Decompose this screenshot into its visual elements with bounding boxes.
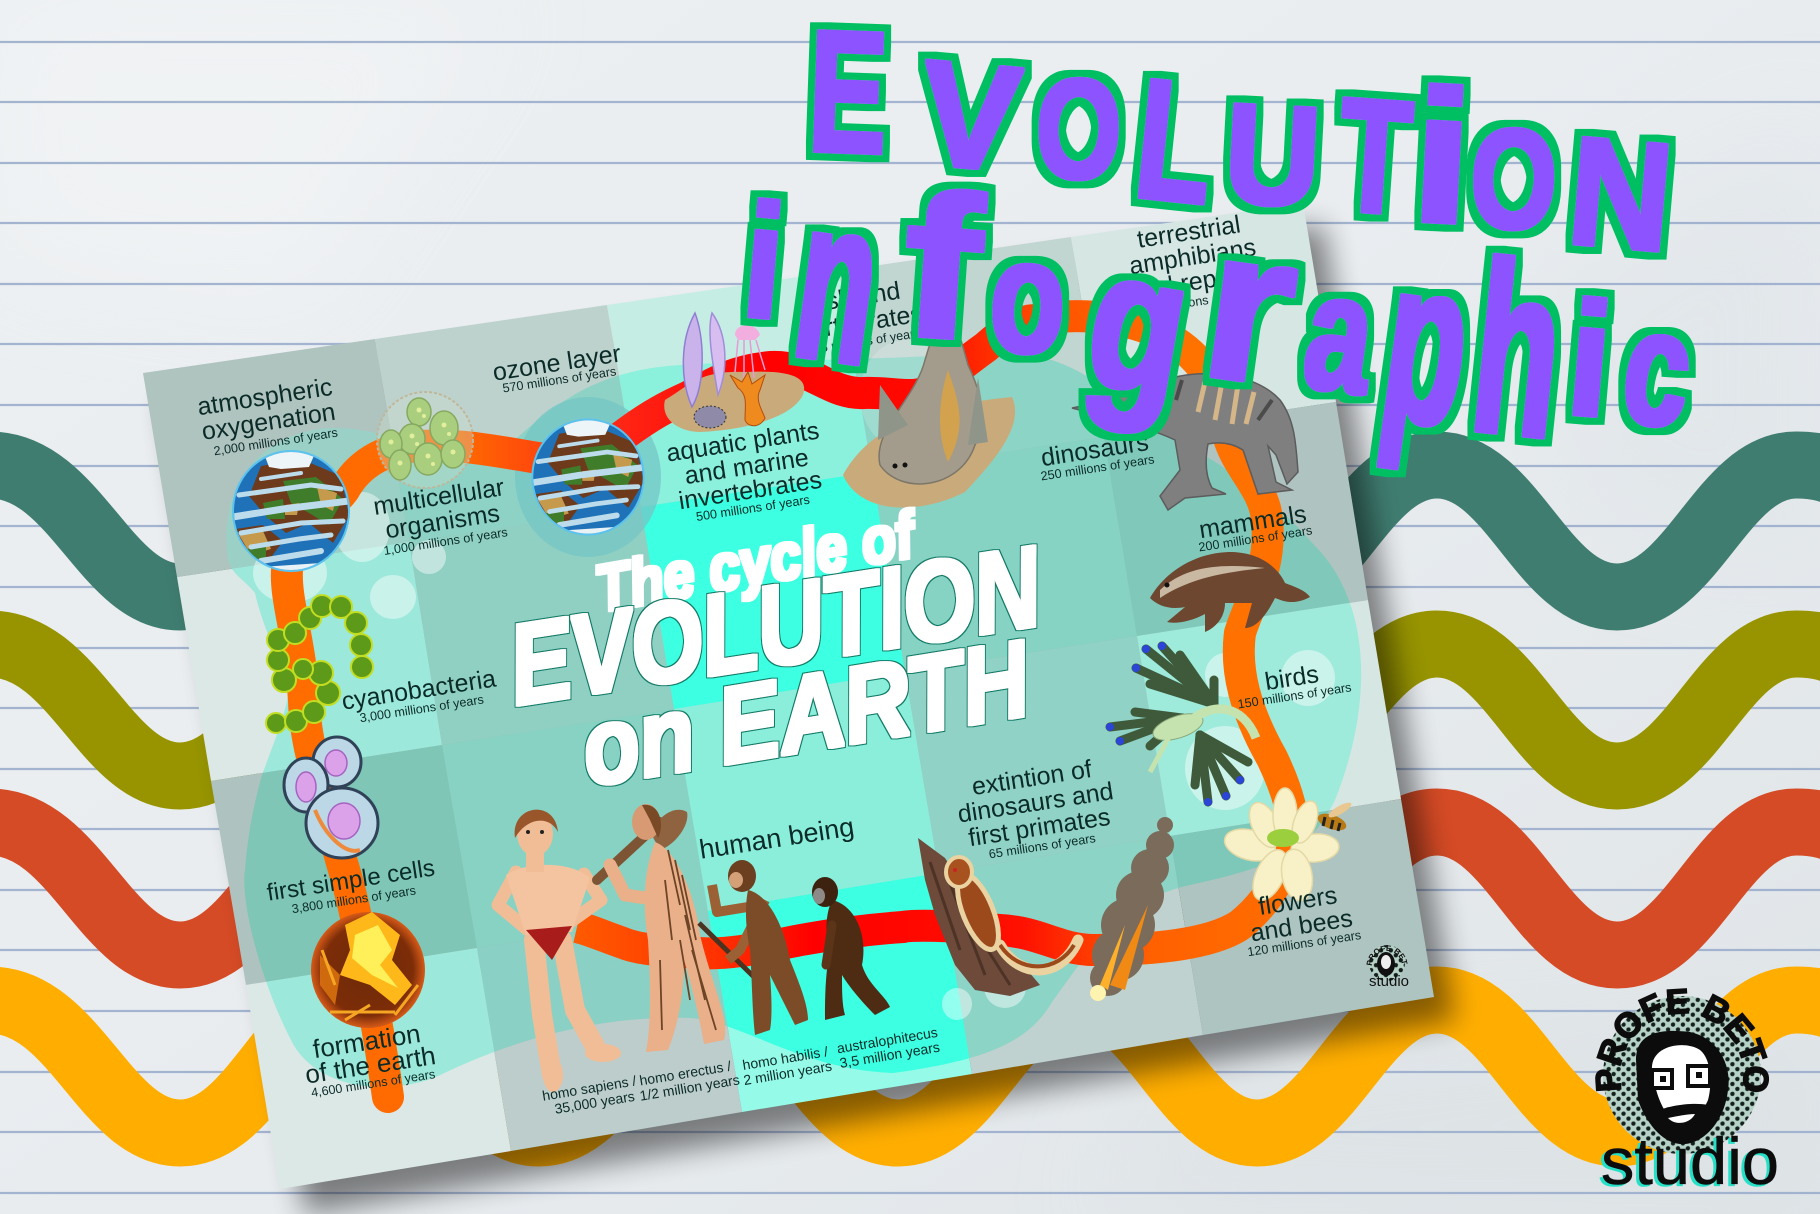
title line: Evolution: O [1468,98,1560,260]
title line: infographic: r [1190,181,1311,433]
title line: Evolution: T [1333,63,1417,249]
logo face [1636,1031,1729,1144]
label: first simple cells: 3,800 millions of years [291,883,417,916]
orange to red evolution road [287,316,1293,1097]
label: homo erectus [636,1057,741,1104]
label: aquatic plants and marine invertebrates: invertebrates [677,466,824,515]
label: homo habilis: 2 million years [742,1058,833,1088]
light bubbles [253,340,1335,1020]
label: extinction of dinosaurs and first primates: 65 millions of years [988,831,1097,861]
title line: Evolution: V [914,30,1027,203]
label: fish and vertebrates: fish and [811,277,902,318]
icon: multicellular organism [377,392,473,488]
title line: Evolution: i [1405,50,1479,264]
label: dinosaurs: dinosaurs [1039,428,1150,472]
label: fish and vertebrates: 435 millions of years [806,326,921,357]
label: atmospheric oxygenation: atmospheric [195,373,334,421]
label: aquatic plants and marine invertebrates: aquatic plants [664,417,821,468]
label: homo erectus: 1/2 million years [638,1071,741,1104]
label: human being: human being [697,811,856,865]
label: homo erectus: homo erectus / [638,1058,732,1089]
label: homo sapiens: 35,000 years [553,1088,636,1117]
wave: olive [0,644,1820,776]
label: multicellular organisms [371,473,512,558]
title line: Evolution: U [1221,74,1324,238]
label: formation of the earth: formation [311,1018,422,1064]
title line: infographic: c [1613,272,1703,464]
icon: first simple cells [284,737,378,858]
title line: infographic: o [986,205,1070,389]
icon: squirrel on tree [918,838,1078,996]
label: terrestrial amphibians and reptiles: terrestrial [1135,210,1242,254]
icon: homo erectus [597,804,725,1052]
label: ozone layer: ozone layer [491,339,623,387]
title line: infographic [737,145,1703,491]
icon: oxygenated earth [231,449,351,575]
label: extinction of dinosaurs and first primates: first primates [967,803,1112,852]
icon: prehistoric fish [843,300,1015,508]
logo arc text: PROFE BETO [1595,988,1770,1092]
label: terrestrial amphibians and reptiles: amphibians [1127,233,1258,280]
icon: homo habilis [699,860,808,1035]
label: formation of the earth: 4,600 millions of years [310,1067,436,1100]
teal blob over poster [226,356,1362,1087]
title: the cycle of evolution on earth: on EARTH [573,617,1039,809]
poster fold cells [143,203,1434,1189]
label: homo sapiens [541,1072,640,1119]
label: flowers and bees: 120 millions of years [1246,928,1362,959]
label: homo habilis [740,1043,833,1088]
label: multicellular organisms: multicellular [371,473,506,521]
icon: dinosaur [1072,374,1298,510]
label: flowers and bees: and bees [1249,904,1355,947]
label: formation of the earth [299,1016,439,1100]
title line: infographic: a [1295,236,1387,430]
earth halo [515,397,661,557]
wave: red [0,822,1820,955]
icon: australopithecus [812,877,890,1020]
label: multicellular organisms: 1,000 millions of years [383,525,509,558]
label: cyanobacteria: cyanobacteria [340,664,498,716]
title line: Evolution: O [1033,48,1124,210]
label: aquatic plants and marine invertebrates: 500 millions of years [695,493,811,524]
label: ozone layer: 570 millions of years [502,364,617,395]
panel: poster [143,209,1434,1188]
title line: infographic: i [737,170,791,354]
label: birds: 150 millions of years [1237,680,1352,711]
poster shadow [165,225,1455,1214]
logo studio word: studio [1598,1126,1776,1200]
label: mammals: 200 millions of years [1198,523,1313,554]
title line: Evolution: E [806,0,890,191]
title line: Evolution: L [1128,42,1223,240]
label: aquatic plants and marine invertebrates [664,417,830,527]
label: atmospheric oxygenation: 2,000 millions of years [213,426,339,458]
title line: infographic: g [1073,204,1205,440]
title line: infographic: i [1561,268,1619,452]
label: atmospheric oxygenation: oxygenation [200,398,337,446]
label: extinction of dinosaurs and first primates: extintion of [970,755,1094,801]
title: Evolution infographic [737,0,1703,491]
title line: infographic: h [1461,211,1574,491]
icon: bird [1106,642,1256,806]
title line: infographic: n [782,145,895,415]
label: terrestrial amphibians and reptiles: and reptiles [1130,258,1262,305]
label: extinction of dinosaurs and first primates [952,752,1121,865]
title line: Evolution: N [1562,105,1679,285]
title line: Evolution [806,0,1679,285]
label: atmospheric oxygenation [195,373,340,460]
label: dinosaurs: 250 millions of years [1040,452,1155,483]
title line: infographic: p [1369,207,1485,478]
label: fish and vertebrates: vertebrates [797,299,925,346]
title: the cycle of evolution on earth [501,496,1051,809]
icon: small studio logo [1366,945,1409,990]
label: australophitecus: 3,5 million years [838,1039,941,1071]
icon: meteor [1090,817,1174,1001]
label: cyanobacteria: 3,000 millions of years [359,692,485,725]
logo studio word: studio [1601,1124,1779,1198]
label: flowers and bees: flowers [1257,881,1339,921]
icon: flower and bee [1221,788,1353,905]
label: mammals: mammals [1197,500,1308,544]
title line: infographic: f [895,150,990,383]
label: extinction of dinosaurs and first primates: dinosaurs and [956,777,1115,829]
label: first simple cells: first simple cells [265,854,437,907]
icon: cyanobacteria chain [266,595,373,733]
icon: homo sapiens [498,810,621,1092]
label: formation of the earth: of the earth [303,1040,438,1090]
label: terrestrial amphibians and reptiles [1123,208,1264,318]
label: homo habilis: homo habilis / [741,1043,829,1073]
label: australophitecus [836,1024,941,1071]
icon: ozone layer earth [530,417,646,538]
title: the cycle of evolution on earth: EVOLUTION [501,523,1051,730]
wave: yellow [0,1000,1820,1133]
label: australophitecus: australophitecus [836,1024,939,1056]
icon: small studio logo: studio [1369,973,1409,990]
label: fish and vertebrates [793,274,926,358]
title: the cycle of evolution on earth: The cycle of [590,496,925,626]
wave: teal [0,465,1820,597]
icon: molten earth [311,912,425,1028]
label: terrestrial amphibians and reptiles: 350 millions of years [1142,286,1257,317]
icon: aquatic plants and invertebrates [664,313,804,432]
label: multicellular organisms: organisms [383,499,502,544]
logo: Profe Beto studio [1595,988,1779,1200]
label: birds [1233,656,1352,711]
label: aquatic plants and marine invertebrates: and marine [683,444,811,490]
icon: mammal [1150,552,1310,632]
icon: small studio logo: PROFE BETO [1366,946,1408,966]
label: flowers and bees [1239,879,1362,959]
label: birds: birds [1263,660,1321,696]
logo halftone disc [1603,996,1761,1154]
label: homo sapiens: homo sapiens / [541,1072,637,1104]
